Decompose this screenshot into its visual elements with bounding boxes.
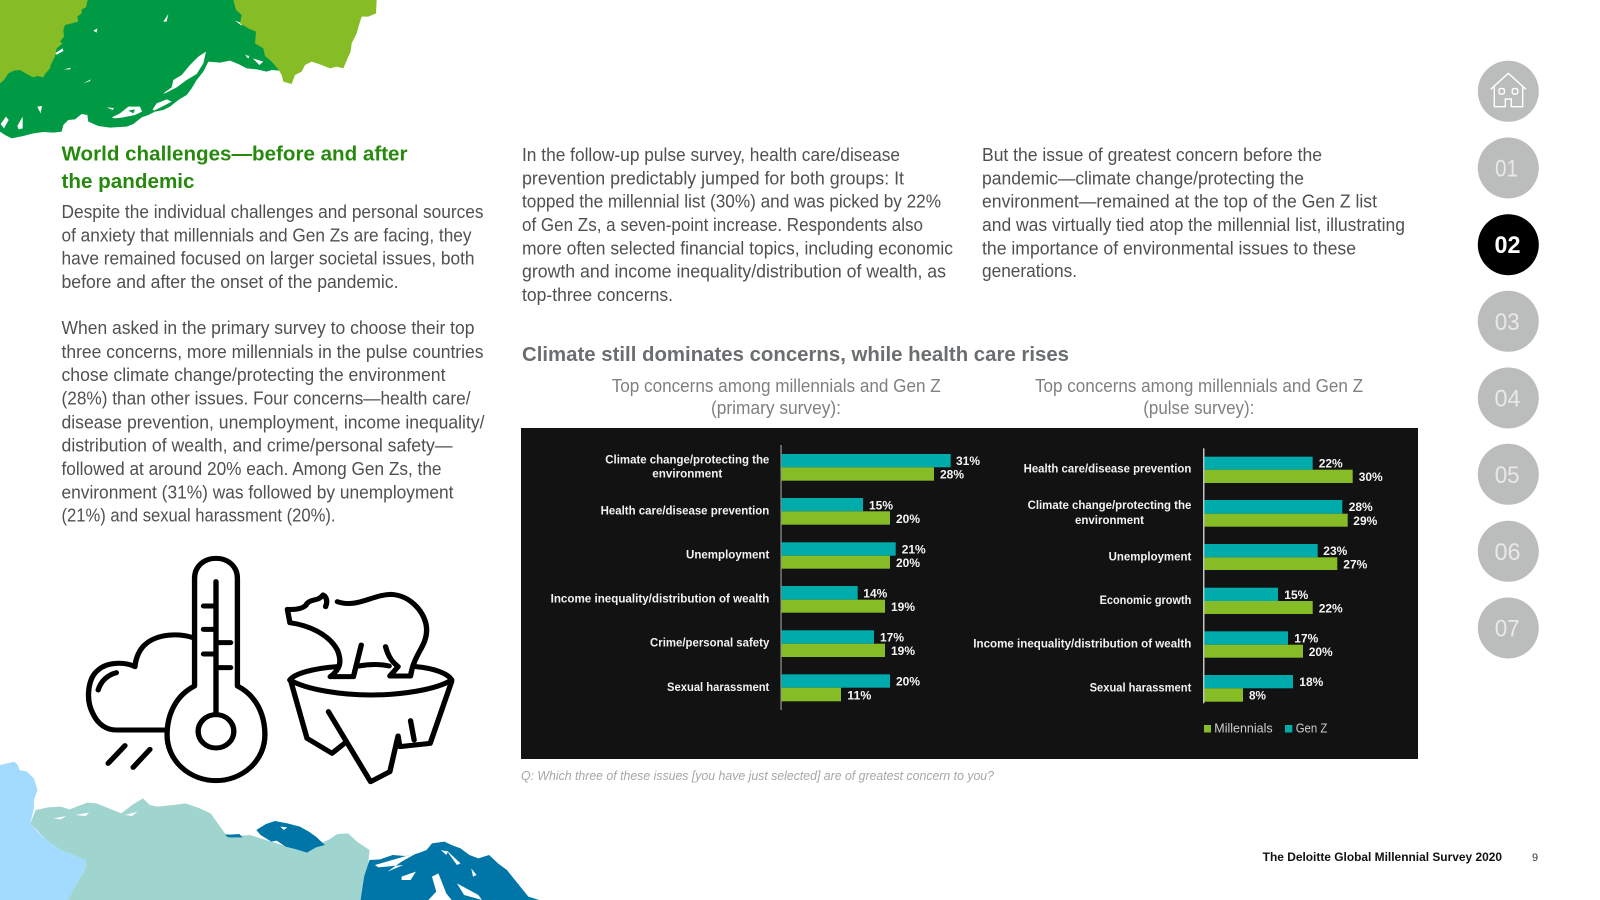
- text block: primary survey paragraph: disease prevention, unemployment, income inequality/: [62, 412, 484, 432]
- legend: Millennials: [1214, 722, 1273, 736]
- row: sexual harassment: [1090, 675, 1324, 702]
- text block: greatest concern paragraph: pandemic—climate change/protecting the: [982, 168, 1304, 188]
- row: sexual harassment: 11%: [847, 688, 872, 702]
- row: income inequality: Income inequality/distribution of wealth: [973, 639, 1191, 651]
- text block: greatest concern paragraph: the importance of environmental issues to these: [982, 238, 1356, 258]
- text block: greatest concern paragraph: and was virtually tied atop the millennial list, illustrating: [982, 215, 1405, 235]
- text block: greatest concern paragraph: environment—remained at the top of the Gen Z list: [982, 192, 1377, 212]
- row: climate change: environment: [1075, 515, 1144, 527]
- row: health care: 20%: [896, 512, 920, 526]
- text block: intro paragraph: Despite the individual challenges and personal sources: [62, 202, 484, 222]
- row: income inequality: Income inequality/distribution of wealth: [551, 594, 769, 606]
- text block: pulse survey paragraph: prevention predictably jumped for both groups: It: [522, 168, 904, 188]
- nav button: 04: [1478, 368, 1539, 428]
- row: unemployment: Unemployment: [686, 549, 769, 561]
- nav button: 04: 04: [1494, 386, 1520, 413]
- footnote: Q: Which three of these issues [you have just selected] are of greatest concern to you?: [521, 769, 994, 783]
- chart subtitle: primary survey: Top concerns among millennials and Gen Z: [612, 376, 941, 396]
- text block: primary survey paragraph: (21%) and sexual harassment (20%).: [62, 506, 336, 526]
- row: climate change: [605, 454, 980, 482]
- row: crime: [650, 630, 915, 658]
- row: income inequality: 19%: [891, 600, 915, 614]
- text block: pulse survey paragraph: topped the millennial list (30%) and was picked by 22%: [522, 192, 941, 212]
- text block: intro paragraph: before and after the onset of the pandemic.: [62, 272, 398, 292]
- row: health care: [601, 498, 920, 526]
- text block: primary survey paragraph: distribution of wealth, and crime/personal safety—: [62, 436, 452, 456]
- row: crime: Crime/personal safety: [650, 638, 770, 650]
- row: sexual harassment: Sexual harassment: [667, 682, 769, 694]
- icon: thermometer with cloud and rain: [89, 558, 265, 781]
- decorative green brush strokes, top left: [0, 0, 377, 138]
- nav button: 01: [1478, 138, 1539, 198]
- nav button: home: [1478, 61, 1539, 122]
- row: sexual harassment: 8%: [1249, 688, 1266, 702]
- row: sexual harassment: 18%: [1299, 675, 1324, 689]
- row: income inequality: 20%: [1309, 645, 1333, 659]
- chart subtitle: pulse survey: Top concerns among millennials and Gen Z: [1035, 376, 1363, 396]
- text block: primary survey paragraph: three concerns, more millennials in the pulse countries: [62, 342, 484, 362]
- row: health care: [1024, 457, 1383, 484]
- row: unemployment: Unemployment: [1109, 551, 1191, 563]
- chart subtitle: primary survey: (primary survey):: [711, 398, 841, 418]
- chart subtitle: pulse survey: (pulse survey):: [1143, 398, 1254, 418]
- text block: greatest concern paragraph: [982, 145, 1405, 281]
- text block: pulse survey paragraph: more often selected financial topics, including economic: [522, 238, 953, 258]
- row: climate change: environment: [652, 469, 722, 481]
- row: economic growth: [1100, 588, 1343, 615]
- text block: greatest concern paragraph: generations.: [982, 261, 1077, 281]
- text block: primary survey paragraph: followed at around 20% each. Among Gen Zs, the: [62, 459, 442, 479]
- navigation: section circles: [1478, 61, 1539, 659]
- row: climate change: 31%: [956, 454, 980, 468]
- icon: polar bear on melting iceberg: [287, 594, 452, 782]
- text block: pulse survey paragraph: top-three concerns.: [522, 285, 673, 305]
- text block: primary survey paragraph: chose climate change/protecting the environment: [62, 365, 446, 385]
- text block: primary survey paragraph: environment (31%) was followed by unemployment: [62, 482, 454, 502]
- row: crime: 19%: [891, 644, 915, 658]
- text block: primary survey paragraph: When asked in the primary survey to choose their top: [62, 318, 474, 338]
- nav button: 05: [1478, 444, 1539, 505]
- footer: report title: The Deloitte Global Millennial Survey 2020: [1263, 852, 1502, 864]
- row: climate change: 28%: [1349, 500, 1373, 514]
- panel: dark chart background: [521, 428, 1418, 759]
- footer: page number: 9: [1532, 852, 1538, 864]
- nav button: 07: 07: [1495, 616, 1520, 643]
- chart subtitle: pulse survey: [1035, 376, 1363, 418]
- text block: pulse survey paragraph: [522, 145, 953, 305]
- heading: world challenges: the pandemic: [62, 170, 194, 193]
- row: economic growth: 22%: [1319, 601, 1343, 615]
- row: economic growth: Economic growth: [1100, 595, 1191, 607]
- row: sexual harassment: Sexual harassment: [1090, 683, 1191, 695]
- nav button: 05: 05: [1495, 462, 1520, 489]
- row: health care: 30%: [1359, 470, 1383, 484]
- nav button: 07: [1478, 598, 1539, 658]
- icon: house: [1491, 73, 1526, 107]
- row: unemployment: 21%: [902, 542, 926, 556]
- legend: Gen Z: [1296, 722, 1328, 736]
- row: income inequality: 14%: [863, 587, 888, 601]
- row: unemployment: [686, 542, 926, 570]
- text block: pulse survey paragraph: growth and income inequality/distribution of wealth, as: [522, 262, 946, 282]
- text block: intro paragraph: of anxiety that millennials and Gen Zs are facing, they: [62, 226, 472, 246]
- row: income inequality: 17%: [1294, 632, 1319, 646]
- row: unemployment: [1109, 544, 1368, 571]
- chart subtitle: primary survey: [612, 376, 941, 418]
- text block: pulse survey paragraph: In the follow-up pulse survey, health care/disease: [522, 145, 900, 165]
- row: health care: 15%: [869, 498, 893, 512]
- row: economic growth: 15%: [1284, 588, 1309, 602]
- nav button: 06: [1478, 521, 1539, 582]
- row: crime: 17%: [880, 631, 904, 645]
- row: climate change: 29%: [1353, 514, 1378, 528]
- row: unemployment: 20%: [896, 556, 920, 570]
- text block: greatest concern paragraph: But the issue of greatest concern before the: [982, 145, 1322, 165]
- row: health care: 22%: [1319, 457, 1343, 471]
- nav button: 01: 01: [1495, 156, 1518, 182]
- nav button: 02 active: [1478, 214, 1539, 275]
- text block: primary survey paragraph: [62, 318, 484, 526]
- nav button: 03: 03: [1495, 309, 1520, 336]
- text block: intro paragraph: have remained focused on larger societal issues, both: [62, 248, 474, 268]
- nav button: 02 active: 02: [1494, 232, 1520, 259]
- row: income inequality: [973, 631, 1333, 659]
- row: income inequality: [551, 586, 915, 614]
- nav button: 03: [1478, 291, 1539, 352]
- text block: pulse survey paragraph: of Gen Zs, a seven-point increase. Respondents also: [522, 215, 923, 235]
- row: unemployment: 27%: [1343, 557, 1368, 571]
- bar chart: primary survey: [551, 445, 980, 710]
- row: climate change: 28%: [940, 468, 964, 482]
- row: climate change: [1028, 500, 1378, 528]
- row: unemployment: 23%: [1323, 544, 1348, 558]
- heading: chart section title: Climate still dominates concerns, while health care rises: [522, 343, 1069, 366]
- text block: intro paragraph: [62, 202, 484, 292]
- nav button: 06: 06: [1494, 539, 1520, 566]
- text block: primary survey paragraph: (28%) than other issues. Four concerns—health care/: [62, 388, 470, 408]
- row: sexual harassment: 20%: [896, 675, 920, 689]
- decorative blue brush strokes, bottom left: [0, 762, 539, 900]
- heading: world challenges: [62, 143, 408, 193]
- bar chart: pulse survey: [973, 448, 1383, 703]
- row: health care: Health care/disease prevention: [601, 506, 769, 518]
- heading: world challenges: World challenges—before and after: [62, 143, 408, 166]
- row: climate change: Climate change/protecting the: [1028, 500, 1191, 512]
- row: climate change: Climate change/protecting the: [605, 454, 769, 466]
- legend: [1204, 722, 1328, 736]
- row: health care: Health care/disease prevention: [1024, 464, 1191, 476]
- row: sexual harassment: [667, 674, 920, 702]
